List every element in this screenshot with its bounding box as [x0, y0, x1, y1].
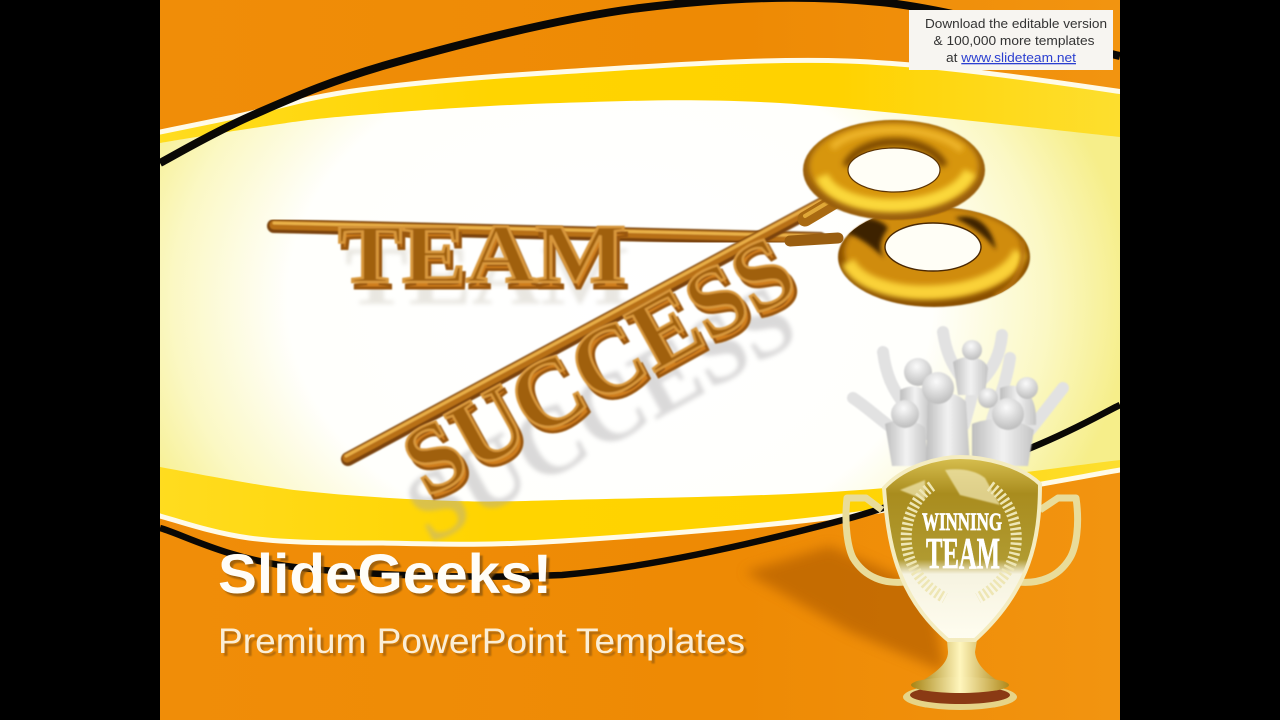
laurel wreath	[906, 486, 1016, 598]
key collar	[790, 194, 842, 241]
subtitle: Premium PowerPoint Templates: Premium PowerPoint Templates	[221, 625, 748, 664]
SUCCESS shaft	[346, 198, 828, 459]
team of white figures	[853, 332, 1063, 466]
title: SlideGeeks!: SlideGeeks!	[218, 542, 552, 605]
torsos	[953, 357, 988, 395]
download notice box	[909, 10, 1113, 70]
TEAM reflection: TEAM	[345, 230, 630, 323]
SUCCESS lettering: SUCCESS	[389, 220, 816, 522]
download notice box: Download the editable version	[925, 16, 1107, 31]
trophy label: TEAM	[926, 529, 1000, 578]
SUCCESS reflection: SUCCESS	[388, 264, 812, 564]
heads	[904, 358, 932, 386]
trophy	[846, 457, 1078, 710]
raised arms	[853, 332, 1063, 430]
globe highlights	[900, 469, 1000, 505]
trophy cup	[884, 457, 1040, 640]
upper ring	[803, 120, 985, 220]
trophy label	[922, 509, 1002, 578]
key: SUCCESS	[346, 198, 828, 564]
subtitle: Premium PowerPoint Templates: Premium PowerPoint Templates	[218, 622, 745, 661]
lower ring	[838, 207, 1030, 307]
TEAM lettering: TEAM	[338, 208, 626, 301]
key: TEAM	[274, 208, 820, 323]
download notice box: at www.slideteam.net	[946, 50, 1076, 65]
TEAM shaft	[274, 223, 820, 239]
title: SlideGeeks!: SlideGeeks!	[221, 545, 555, 608]
slide background swooshes	[150, 0, 1130, 720]
TEAM lettering: TEAM	[341, 214, 629, 307]
trophy label: WINNING	[922, 509, 1002, 536]
SUCCESS lettering: SUCCESS	[385, 215, 812, 517]
download notice box: & 100,000 more templates	[934, 33, 1095, 48]
trophy stem and base	[917, 640, 1003, 684]
trophy handles	[846, 498, 1078, 582]
slide canvas	[160, 0, 1120, 720]
key rings	[790, 120, 1030, 307]
